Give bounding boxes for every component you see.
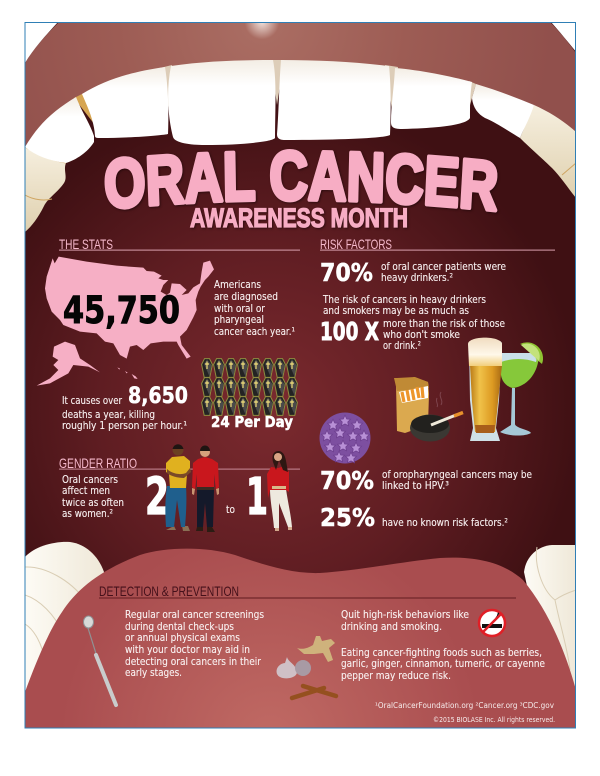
label: 24 per day: 24 Per Day	[211, 413, 293, 431]
icon: dental mirror	[84, 616, 116, 705]
text: screenings: or annual physical exams	[125, 632, 240, 644]
corner background: top left	[26, 23, 58, 62]
panel: risk factors	[320, 236, 555, 532]
stat: 100X risk: and smokers may be as much as	[323, 305, 469, 317]
ratio: 2: 2	[145, 468, 169, 527]
copyright: ©2015 BIOLASE Inc. All rights reserved.	[433, 716, 555, 724]
mouth interior	[26, 23, 575, 585]
tooth gaps	[74, 60, 476, 122]
icon: cigarette pack	[394, 377, 429, 433]
text: screenings	[125, 609, 264, 679]
man in red shirt	[192, 446, 219, 532]
text: screenings: early stages.	[125, 667, 182, 679]
upper teeth	[25, 60, 576, 232]
stat: 100X risk: The risk of cancers in heavy drinkers	[322, 294, 486, 306]
stat: 70% heavy drinkers: heavy drinkers.²	[381, 272, 453, 284]
stat: 70% HPV	[320, 466, 532, 495]
panel: the stats	[37, 236, 300, 432]
sources: ¹OralCancerFoundation.org ²Cancer.org ³CDC.gov	[375, 701, 554, 710]
right canine	[472, 84, 534, 138]
right central incisor	[277, 60, 391, 140]
text: Americans diagnosed: cancer each year.¹	[214, 326, 295, 338]
icon: cinnamon sticks	[292, 686, 336, 698]
stat: 45,750: 45,750	[63, 289, 180, 332]
stat: 70% HPV: of oropharyngeal cancers may be	[382, 469, 532, 481]
text: quit high-risk behaviors: drinking and smoking.	[341, 621, 442, 633]
lower left tooth	[25, 542, 104, 700]
left canine	[25, 97, 94, 163]
text: screenings: during dental check-ups	[125, 621, 234, 633]
text: cancer-fighting foods: Eating cancer-fighting foods such as berries,	[341, 647, 542, 659]
heading: the stats: THE STATS	[59, 236, 113, 252]
heading: detection and prevention: DETECTION & PREVENTION	[99, 583, 239, 599]
text: deaths per year: It causes over	[62, 395, 123, 407]
stat: 100X risk	[320, 294, 505, 352]
stat: 100X risk: who don't smoke	[383, 329, 460, 341]
text: Americans diagnosed: Americans	[214, 279, 261, 291]
stat: 25% no known factors	[320, 503, 508, 532]
text: screenings: Regular oral cancer screenings	[125, 609, 264, 621]
text: cancer-fighting foods	[341, 647, 545, 682]
tongue	[25, 549, 576, 728]
left molar	[25, 147, 66, 232]
stat: 70% HPV: linked to HPV.³	[382, 480, 449, 492]
stat: 25% no known factors: 25%	[320, 503, 375, 532]
text: gender ratio: affect men	[62, 485, 110, 497]
stat: 70% HPV: 70%	[320, 466, 374, 495]
icon: beer glass	[468, 338, 502, 441]
stat: 70% heavy drinkers	[321, 262, 506, 283]
stat: 25% no known factors: have no known risk factors.²	[382, 517, 508, 529]
right molar	[520, 105, 576, 198]
text: deaths per year: roughly 1 person per hour.¹	[62, 420, 187, 432]
text: deaths per year: 8,650	[128, 384, 188, 409]
upper lip	[25, 22, 576, 155]
man in yellow shirt	[165, 444, 191, 531]
text: screenings: with your doctor may aid in	[125, 644, 250, 656]
text: Americans diagnosed: with oral or	[214, 303, 266, 315]
text: gender ratio: twice as often	[62, 497, 124, 509]
left central incisor	[168, 60, 276, 145]
icon: ginger	[297, 636, 335, 662]
text: Americans diagnosed: pharyngeal	[214, 314, 264, 326]
text: Americans diagnosed: are diagnosed	[214, 291, 278, 303]
heading: gender ratio: GENDER RATIO	[59, 455, 137, 471]
stat: 70% heavy drinkers: 70%	[320, 258, 373, 287]
stat: 70% heavy drinkers: of oral cancer patients were	[381, 261, 506, 273]
text: gender ratio: as women.²	[62, 508, 113, 520]
icon: garlic	[277, 657, 311, 678]
heading: risk factors: RISK FACTORS	[320, 236, 392, 252]
text: Americans diagnosed	[214, 279, 295, 338]
ratio: 1: 1	[246, 468, 268, 527]
title: awareness month: AWARENESS MONTH	[190, 203, 408, 233]
icon: no smoking	[479, 610, 505, 636]
text: deaths per year: deaths a year, killing	[62, 409, 155, 421]
stat: 100X risk: more than the risk of those	[383, 318, 505, 330]
icon: HPV virus	[320, 412, 370, 464]
panel: gender ratio	[59, 444, 300, 532]
right lateral incisor	[391, 68, 472, 129]
text: screenings: detecting oral cancers in their	[125, 656, 262, 668]
panel: detection and prevention	[84, 583, 555, 724]
icon: ashtray with cigarette	[410, 392, 463, 442]
title	[104, 149, 499, 230]
left lateral incisor	[82, 67, 168, 138]
text: gender ratio	[62, 474, 124, 520]
text: cancer-fighting foods: garlic, ginger, cinnamon, tumeric, or cayenne	[341, 658, 545, 670]
coffin pictogram: 24 per day	[202, 359, 297, 415]
US map	[37, 257, 214, 386]
text: deaths per year	[62, 384, 188, 432]
corner background: top right	[552, 23, 575, 50]
stat: 100X risk: or drink.²	[383, 340, 421, 352]
text: quit high-risk behaviors	[341, 609, 469, 633]
stat: 100X risk: 100 X	[320, 317, 379, 346]
ratio: to: to	[226, 504, 235, 516]
lower right tooth	[524, 545, 576, 690]
text: cancer-fighting foods: pepper may reduce risk.	[341, 670, 451, 682]
woman in red top	[267, 451, 292, 531]
title: oral cancer: ORAL CANCER	[104, 149, 499, 214]
text: gender ratio: Oral cancers	[62, 474, 118, 486]
icon: margarita	[500, 342, 543, 436]
text: quit high-risk behaviors: Quit high-risk behaviors like	[341, 609, 469, 621]
